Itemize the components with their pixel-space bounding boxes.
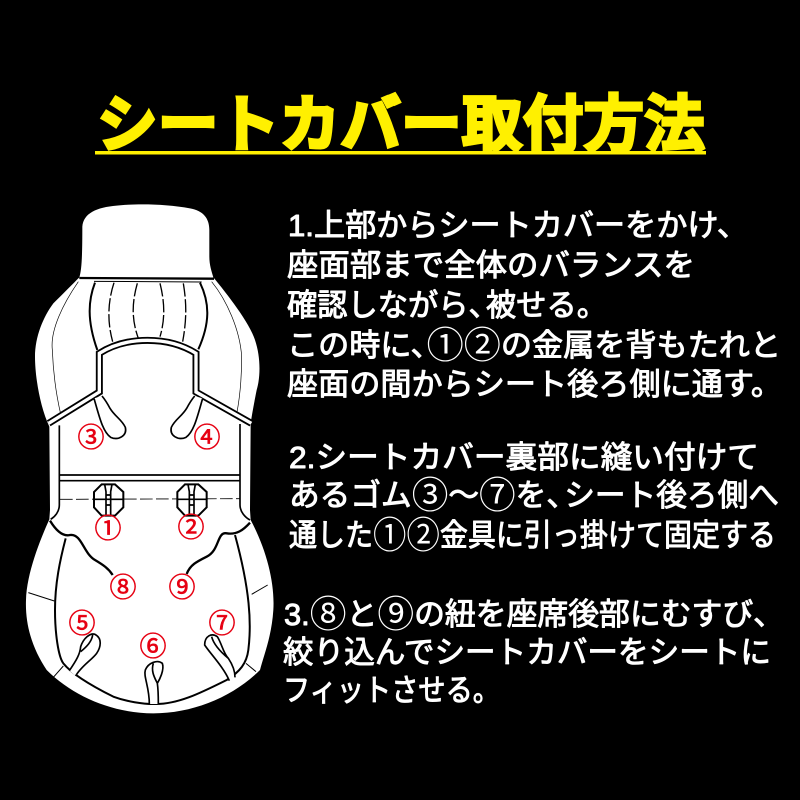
red number labels (68, 416, 236, 664)
red number labels: ④ (194, 416, 220, 455)
step 1 text: 1.上部からシートカバーをかけ、 (288, 208, 748, 243)
red number labels: ⑨ (168, 566, 196, 605)
step 2 text: ①② (373, 505, 440, 559)
step 1 text: ①② (427, 315, 501, 369)
seat diagram (26, 204, 274, 713)
step 3 text: の紐を座席後部にむすび、 (414, 597, 784, 632)
string 8 (50, 521, 113, 575)
step 1 text: の金属を背もたれと (501, 328, 781, 363)
step 1 text: 確認しながら、被せる。 (287, 288, 607, 323)
horizontal seams (59, 475, 240, 481)
step 3 text: フィットさせる。 (283, 673, 500, 708)
side rails (51, 424, 250, 520)
step 2 text: シート後ろ側へ (564, 478, 779, 513)
step 1 text (287, 208, 782, 402)
seat silhouette (26, 204, 274, 713)
red number labels: ① (94, 507, 122, 546)
step 1 text: この時に、 (287, 328, 441, 363)
loop 4 (171, 396, 203, 438)
step 3 text: と (347, 597, 377, 632)
thin cushion seams (28, 585, 268, 677)
red number labels: ⑧ (110, 566, 136, 605)
step 3 text: 絞り込んでシートカバーをシートに (283, 635, 771, 670)
red number labels: ⑥ (140, 625, 166, 664)
loop 6 (145, 662, 163, 704)
loop 5 (69, 634, 100, 676)
step 2 text: 通した (289, 518, 382, 553)
loop 3 (94, 396, 126, 438)
step 2 text: を、 (516, 478, 577, 513)
step 2 text: 2.シートカバー裏部に縫い付けて (289, 440, 759, 475)
step 2 text: ③ (412, 465, 448, 519)
headrest band (79, 274, 214, 282)
loop 7 (205, 635, 235, 681)
step 2 text (289, 440, 779, 559)
step 2 text: ～ (448, 478, 479, 513)
string 9 (187, 523, 250, 574)
thin back contours (52, 282, 242, 414)
step 2 text: ⑦ (479, 465, 516, 519)
backrest pleats (90, 283, 207, 350)
step 1 text: 座面の間からシート後ろ側に通す。 (287, 367, 782, 402)
back panel outline (49, 340, 251, 423)
red number labels: ⑦ (208, 602, 236, 641)
seat cushion outline (55, 535, 250, 704)
step 3 text (283, 584, 784, 708)
clip 2 (177, 484, 207, 516)
title: シートカバー取付方法 (97, 74, 705, 164)
step 3 text: ⑨ (377, 584, 414, 638)
step 1 text: 座面部まで全体のバランスを (287, 248, 695, 283)
seat line art (26, 204, 274, 713)
step 2 text: あるゴム (289, 478, 413, 513)
step 3 text: ⑧ (310, 584, 347, 638)
red number labels: ② (178, 506, 204, 545)
clip 1 (94, 484, 123, 516)
red number labels: ③ (78, 416, 104, 455)
step 3 text: 3. (284, 597, 310, 632)
red number labels: ⑤ (68, 602, 96, 641)
